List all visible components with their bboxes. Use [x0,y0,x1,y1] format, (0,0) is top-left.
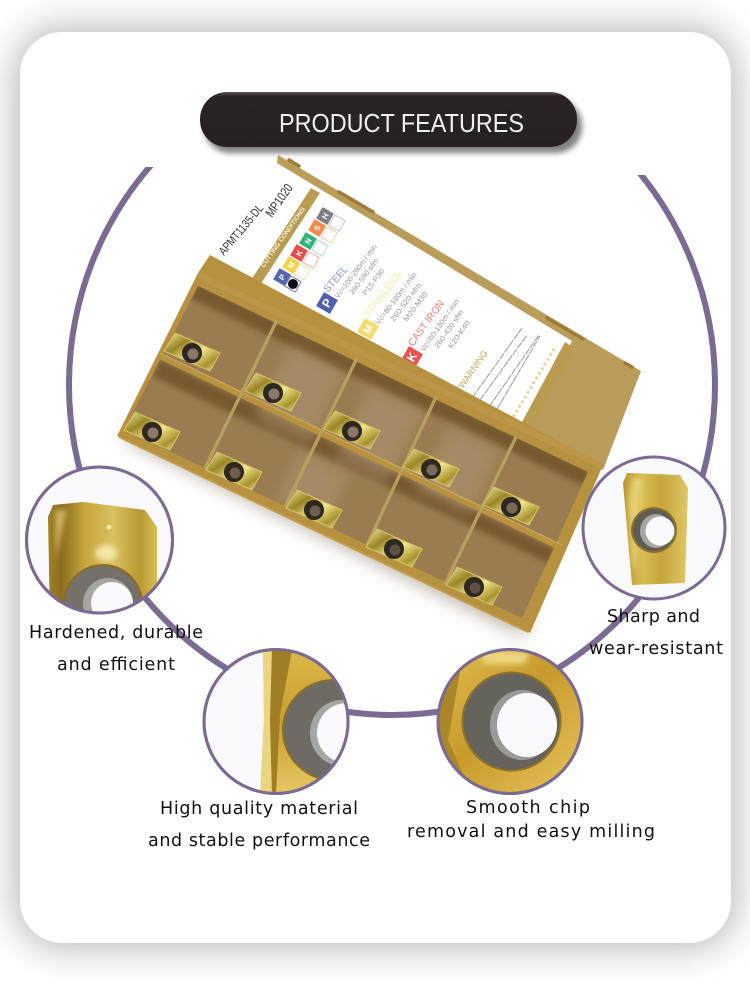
caption: high quality: and stable performance [148,831,370,851]
steel spec: STEEL [321,264,351,295]
detail circle: insert side with hole [202,648,350,795]
material grade chips: S [312,223,323,233]
caption: smooth chip: Smooth chip [466,798,590,818]
top rim highlight [198,275,604,467]
steel spec: Vc=100-280m / min [332,243,379,300]
cast iron spec: K20-K40 [446,319,472,350]
stainless spec [357,270,430,340]
caption: hardened: and efficient [57,655,175,675]
warning [456,328,556,417]
lid ridges [289,160,632,367]
detail circle: close-up of hole [438,650,582,794]
caption: sharp: wear-resistant [589,639,723,659]
stainless spec: 260-520 sfm [388,281,423,323]
ring: large purple arc [66,167,718,718]
band title: CUTTING CONDITIONS [260,206,307,269]
top row inserts [164,333,220,371]
tray drop shadow [125,425,530,636]
material grade chips: M [286,260,297,270]
model text: MP1020 [262,181,296,220]
middle divider [160,356,562,548]
steel spec: P [319,296,335,310]
caption: high quality [148,799,370,851]
tray [117,255,604,633]
vertical dividers [205,320,516,584]
cast iron spec: K [404,349,420,364]
lighter floor patches [255,345,500,525]
detail circle: top view of insert corner [25,466,174,614]
steel spec: 260-590 sfm [347,256,380,296]
caption: high quality: High quality material [160,799,358,819]
header pill: product features [200,92,582,153]
bottom row inserts [124,412,180,450]
caption: hardened [29,623,203,675]
stainless spec: Vc=80-180m / min [373,270,419,326]
material grade chips: H [320,211,331,221]
steel spec: P15-P30 [360,267,386,297]
caption: smooth chip [407,798,655,842]
lid [277,155,641,470]
stainless spec: M20-M30 [401,290,430,323]
detail circle: whole insert [583,457,725,599]
heading text: PRODUCT FEATURES [279,110,524,138]
caption: hardened: Hardened, durable [29,623,203,643]
cast iron spec: 260-430 sfm [432,308,465,350]
caption: sharp: Sharp and [607,607,700,627]
product label card [205,163,572,430]
material grade chips: P [277,272,288,282]
product photo: insert box [117,155,641,636]
stainless spec: STAINLESS [361,270,404,320]
steel spec [316,243,386,314]
caption: sharp [589,607,723,659]
cast iron spec [401,297,472,368]
model text [216,181,296,258]
stainless spec: M [361,323,376,336]
material grade chips: N [303,236,314,246]
cast iron spec: CAST IRON [406,298,447,349]
warning: WARNING [456,348,490,390]
material grade chips [273,207,345,292]
compartment shadows [152,282,590,566]
cast iron spec: Vc=80-130m / min [418,297,461,353]
model text: APMT1135-DL [216,201,266,258]
carbide inserts in tray [124,333,539,605]
material grade chips: K [294,248,305,258]
caption: smooth chip: removal and easy milling [407,822,655,842]
